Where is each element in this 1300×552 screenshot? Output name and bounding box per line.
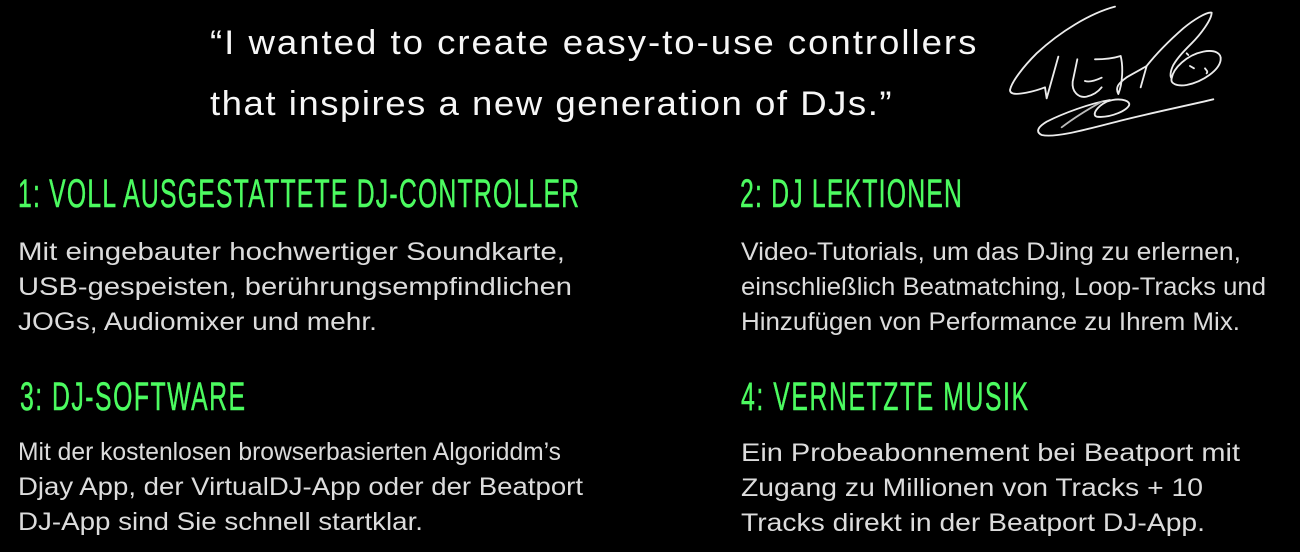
section 4 body: Ein Probeabonnement bei Beatport mit [741,439,1240,467]
section 4 body: Tracks direkt in der Beatport DJ-App. [741,509,1205,537]
section 3 body: DJ-App sind Sie schnell startklar. [18,508,423,536]
section 3 heading: 3: DJ-SOFTWARE [20,375,245,420]
section 1 body: Mit eingebauter hochwertiger Soundkarte, [18,238,565,266]
section 3 body: Mit der kostenlosen browserbasierten Algoriddm’s [18,438,561,466]
section 2 body [741,238,1266,336]
section 4 heading: 4: VERNETZTE MUSIK [741,375,1028,420]
section 3 body: Djay App, der VirtualDJ-App oder der Beatport [18,473,583,501]
section 1 heading: 1: VOLL AUSGESTATTETE DJ-CONTROLLER [18,172,579,217]
section 1 body: USB-gespeisten, berührungsempfindlichen [18,273,572,301]
section 4 body [741,439,1240,537]
section 1 body: JOGs, Audiomixer und mehr. [18,308,377,336]
section 2 body: einschließlich Beatmatching, Loop-Tracks und [741,273,1266,301]
section 2 heading: 2: DJ LEKTIONEN [740,172,962,217]
section 2 body: Video-Tutorials, um das DJing zu erlernen, [741,238,1241,266]
section 4 body: Zugang zu Millionen von Tracks + 10 [741,474,1203,502]
section 2 body: Hinzufügen von Performance zu Ihrem Mix. [741,308,1240,336]
quote: that inspires a new generation of DJs.” [210,84,892,123]
quote: “I wanted to create easy-to-use controllers [210,23,976,62]
section 1 body [18,238,572,336]
icon: handwritten signature [1010,7,1221,136]
section 3 body [18,438,583,536]
quote [210,23,976,123]
